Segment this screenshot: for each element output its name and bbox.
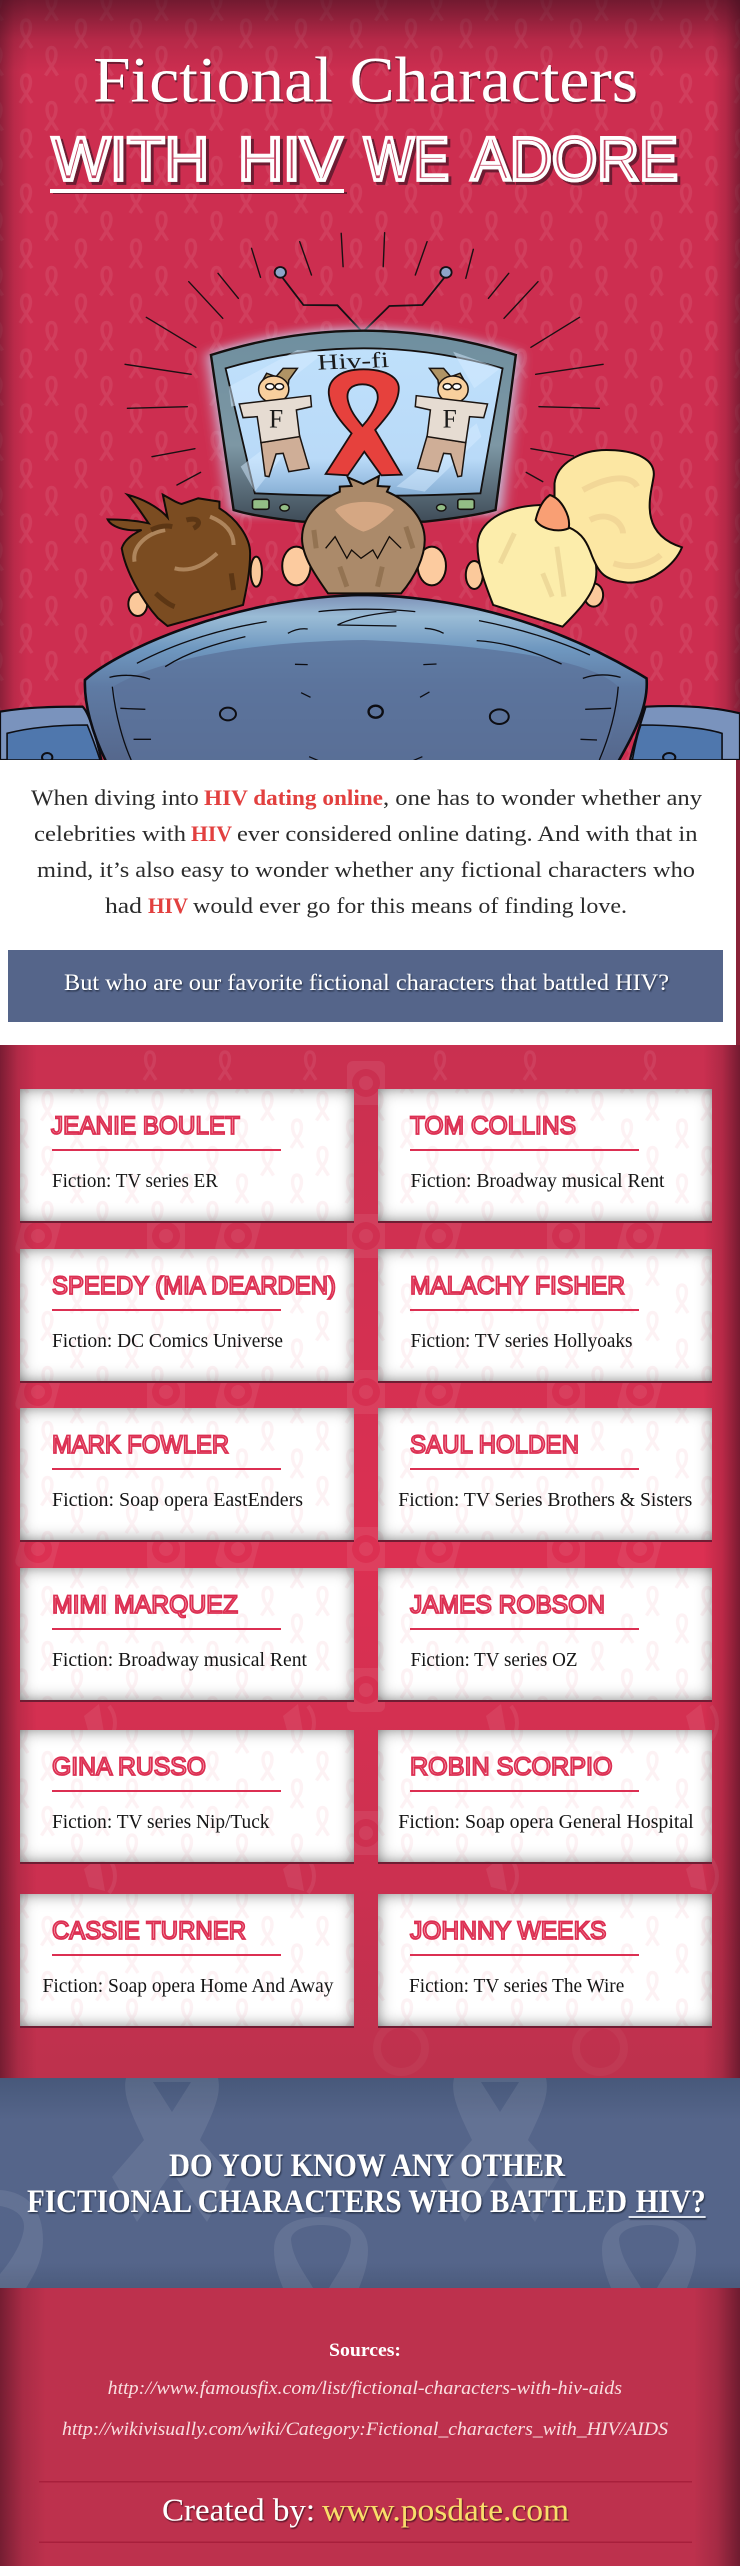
sandy haired viewer bbox=[282, 476, 446, 593]
right doll figure bbox=[415, 368, 488, 477]
icon: red awareness ribbon bbox=[326, 369, 402, 475]
band ribbons bbox=[0, 2078, 696, 2288]
channel label: Hiv-fi bbox=[316, 347, 390, 374]
card: Gina Russo: GINA RUSSO bbox=[52, 1753, 206, 1781]
call to action heading bbox=[27, 2148, 706, 2220]
card: James Robson: Fiction: TV series OZ bbox=[410, 1650, 578, 1671]
credit bbox=[162, 2492, 569, 2528]
intro paragraph: HIV bbox=[148, 893, 188, 918]
card: Saul Holden bbox=[378, 1408, 712, 1542]
title line: With HIV We Adore bbox=[52, 125, 678, 193]
icon: television bbox=[211, 331, 516, 522]
sofa detail lines bbox=[109, 609, 621, 761]
tv buttons bbox=[252, 499, 269, 509]
question banner: But who are our favorite fictional characters that battled HIV? bbox=[64, 970, 669, 995]
sofa buttons bbox=[220, 708, 236, 720]
panel: call to action band bbox=[0, 2078, 740, 2288]
card: Mark Fowler: Fiction: Soap opera EastEnders bbox=[52, 1490, 303, 1511]
intro paragraph: HIV dating online bbox=[204, 785, 383, 810]
panel: footer bbox=[0, 2288, 740, 2566]
panel: red section background with icon pattern bbox=[0, 1045, 740, 2078]
card: Tom Collins: Fiction: Broadway musical Rent bbox=[410, 1171, 665, 1192]
card: Cassie Turner: CASSIE TURNER bbox=[52, 1917, 246, 1945]
card: James Robson: JAMES ROBSON bbox=[410, 1591, 605, 1619]
intro paragraph: HIV bbox=[191, 821, 232, 846]
card: Mark Fowler: MARK FOWLER bbox=[52, 1431, 229, 1459]
card: Speedy: Fiction: DC Comics Universe bbox=[52, 1331, 283, 1352]
sources heading: Sources: bbox=[329, 2341, 401, 2361]
title line: With HIV We Adore: ADORE bbox=[471, 125, 678, 193]
card: Speedy: SPEEDY (MIA DEARDEN) bbox=[52, 1272, 336, 1300]
sofa back bbox=[42, 595, 675, 762]
intro paragraph: had bbox=[105, 893, 142, 918]
source urls bbox=[62, 2378, 669, 2440]
card: Johnny Weeks bbox=[378, 1894, 712, 2028]
intro paragraph: , one has to wonder whether any bbox=[383, 785, 703, 810]
tv light rays bbox=[125, 233, 603, 485]
card: Jeanie Boulet bbox=[20, 1089, 354, 1223]
card: Mimi Marquez: MIMI MARQUEZ bbox=[52, 1591, 238, 1619]
title bbox=[50, 45, 678, 193]
left doll figure bbox=[239, 368, 311, 477]
card: Mimi Marquez: Fiction: Broadway musical Rent bbox=[52, 1650, 308, 1671]
right doll shirt letter: F bbox=[443, 404, 457, 434]
intro paragraph bbox=[31, 785, 703, 918]
card: Tom Collins bbox=[378, 1089, 712, 1223]
panel: character cards bbox=[20, 1089, 712, 2028]
credit: www.posdate.com bbox=[322, 2492, 569, 2528]
brown haired viewer bbox=[108, 495, 262, 626]
card: Jeanie Boulet: Fiction: TV series ER bbox=[52, 1171, 218, 1192]
panel: introduction bbox=[0, 760, 740, 1045]
card: Cassie Turner: Fiction: Soap opera Home And Away bbox=[42, 1976, 334, 1997]
source urls: http://wikivisually.com/wiki/Category:Fictional_characters_with_HIV/AIDS bbox=[62, 2419, 669, 2440]
left doll shirt letter: F bbox=[269, 404, 283, 434]
card: Johnny Weeks: Fiction: TV series The Wire bbox=[409, 1976, 624, 1997]
card: Robin Scorpio bbox=[378, 1730, 712, 1864]
credit: Created by: bbox=[162, 2492, 315, 2528]
intro paragraph: ever considered online dating. And with that in bbox=[237, 821, 698, 846]
title line: With HIV We Adore: WITH bbox=[52, 125, 209, 193]
card: Saul Holden: Fiction: TV Series Brothers & Sisters bbox=[398, 1490, 692, 1511]
call to action heading: HIV? bbox=[636, 2184, 706, 2220]
sofa arms bbox=[0, 706, 740, 760]
card: Mark Fowler bbox=[20, 1408, 354, 1542]
card: Gina Russo bbox=[20, 1730, 354, 1864]
question banner bbox=[8, 950, 723, 1022]
card: Johnny Weeks: JOHNNY WEEKS bbox=[410, 1917, 606, 1945]
panel: hero background bbox=[0, 0, 740, 760]
title line: With HIV We Adore: HIV bbox=[238, 125, 342, 193]
tv glow bbox=[208, 328, 519, 513]
call to action heading: DO YOU KNOW ANY OTHER bbox=[169, 2148, 566, 2184]
card: Robin Scorpio: ROBIN SCORPIO bbox=[410, 1753, 612, 1781]
card: Malachy Fisher: MALACHY FISHER bbox=[410, 1272, 625, 1300]
intro paragraph: would ever go for this means of finding love. bbox=[193, 893, 627, 918]
call to action heading: FICTIONAL CHARACTERS WHO BATTLED bbox=[27, 2184, 627, 2220]
blonde viewer with ponytail bbox=[466, 450, 682, 627]
card: Cassie Turner bbox=[20, 1894, 354, 2028]
title underline bbox=[50, 189, 344, 193]
card: Gina Russo: Fiction: TV series Nip/Tuck bbox=[52, 1812, 270, 1833]
card: Mimi Marquez bbox=[20, 1568, 354, 1702]
card: Malachy Fisher bbox=[378, 1249, 712, 1383]
card: James Robson bbox=[378, 1568, 712, 1702]
screen glare bbox=[229, 350, 500, 492]
title line: Fictional Characters: Fictional Characters bbox=[93, 45, 638, 117]
intro paragraph: mind, it’s also easy to wonder whether any fictional characters who bbox=[37, 857, 695, 882]
lower scene: viewers and sofa bbox=[0, 450, 740, 762]
card: Malachy Fisher: Fiction: TV series Hollyoaks bbox=[410, 1331, 632, 1352]
card: Saul Holden: SAUL HOLDEN bbox=[410, 1431, 579, 1459]
card: Robin Scorpio: Fiction: Soap opera General Hospital bbox=[398, 1812, 694, 1833]
title line: With HIV We Adore: WE bbox=[364, 125, 449, 193]
card: Tom Collins: TOM COLLINS bbox=[410, 1112, 576, 1140]
card: Speedy bbox=[20, 1249, 354, 1383]
intro paragraph: celebrities with bbox=[34, 821, 186, 846]
icon: tv antennas bbox=[275, 267, 452, 331]
card: Jeanie Boulet: JEANIE BOULET bbox=[51, 1112, 240, 1140]
illustration: three people watching TV from a sofa bbox=[0, 233, 740, 762]
source urls: http://www.famousfix.com/list/fictional-characters-with-hiv-aids bbox=[108, 2378, 622, 2399]
intro paragraph: When diving into bbox=[31, 785, 199, 810]
